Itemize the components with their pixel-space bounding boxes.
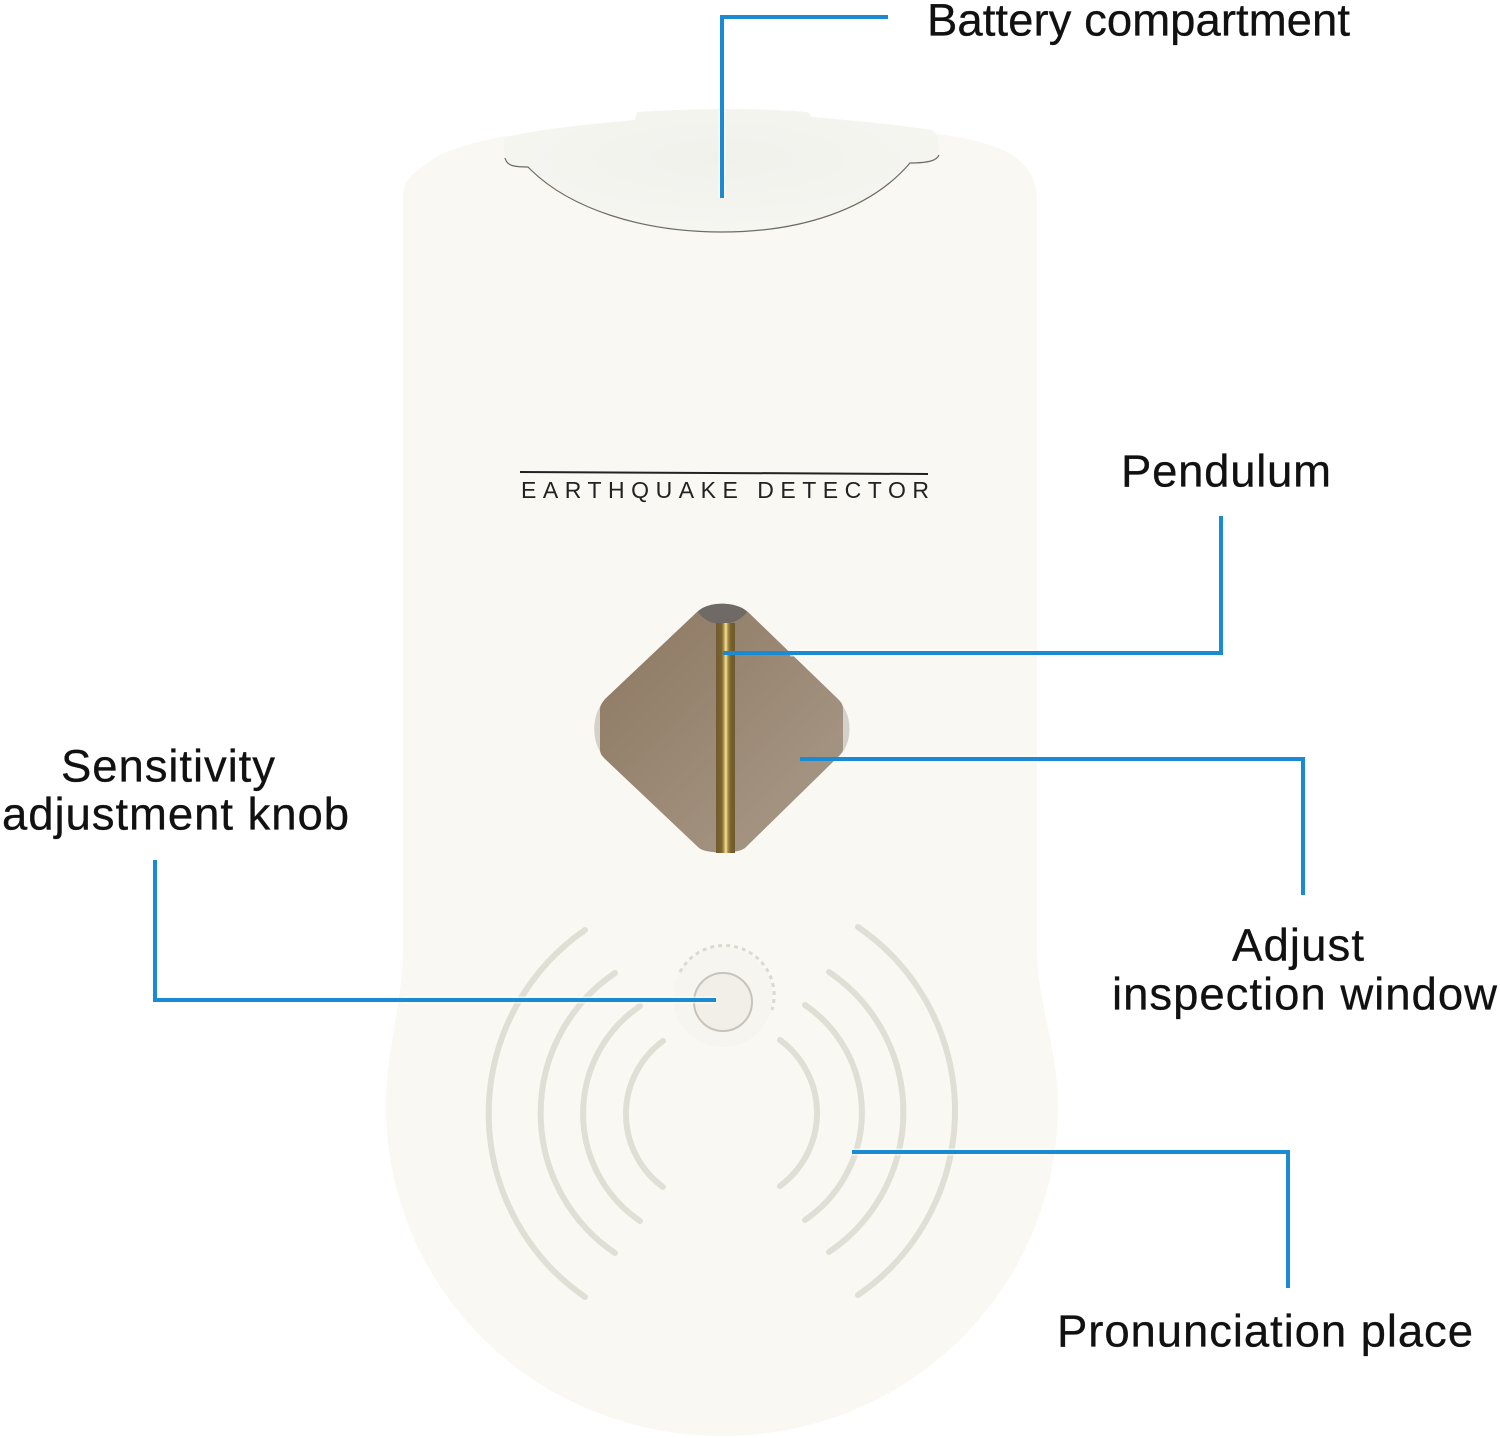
callout line: pendulum (723, 516, 1221, 653)
callout line: battery compartment (722, 17, 888, 198)
callout line: pronunciation place (852, 1152, 1288, 1288)
label: sensitivity adjustment knob (2, 740, 349, 840)
label: pendulum: Pendulum (1121, 446, 1331, 496)
sound holes (489, 927, 955, 1297)
label: adjust inspection window: Adjust (1232, 920, 1364, 970)
label: sensitivity adjustment knob: adjustment knob (2, 788, 349, 840)
label: adjust inspection window: inspection window (1112, 968, 1497, 1020)
pendulum rod (716, 623, 735, 853)
label: sensitivity adjustment knob: Sensitivity (61, 740, 275, 792)
device body (386, 126, 1058, 1436)
label: adjust inspection window (1112, 920, 1497, 1020)
sensitivity knob (673, 945, 774, 1047)
callout line: sensitivity knob (155, 860, 716, 1000)
inspection window (594, 604, 850, 853)
window side tabs (594, 705, 850, 753)
label: pronunciation place: Pronunciation place (1057, 1306, 1473, 1356)
battery cover (504, 109, 939, 232)
callout line: adjust inspection window (800, 759, 1303, 895)
product label: earthquake detector: EARTHQUAKE DETECTOR (521, 477, 929, 503)
pendulum pivot (698, 604, 747, 624)
